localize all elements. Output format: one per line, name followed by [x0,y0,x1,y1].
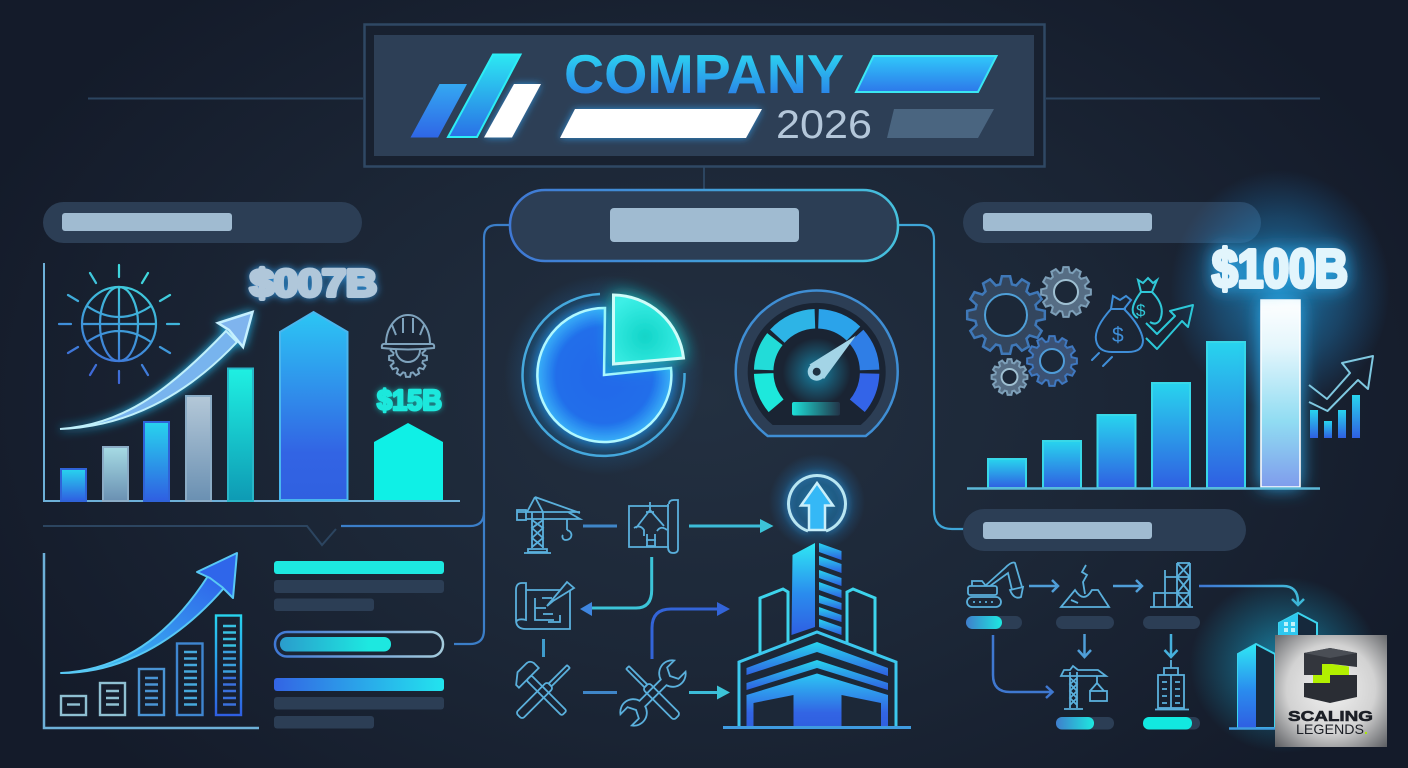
arrow [689,686,730,700]
icon: helmet and gear [382,315,434,377]
icon: gears [967,267,1091,395]
value label: $15B [377,385,442,417]
arrow [1029,580,1058,592]
icon: chevron arrow [1146,305,1193,349]
arrow: growth swoosh [60,312,252,429]
arrow [1164,634,1178,657]
title text: COMPANY [564,43,844,105]
axes [44,553,259,728]
tall arrow bar [280,312,348,500]
glow behind hero bar [1170,170,1390,410]
icon: tower crane [517,497,580,553]
value label: $100B [1212,239,1348,299]
pie chart [504,275,704,475]
icon: small trend chart [1309,356,1373,438]
icon: money bags: $ [1112,324,1124,347]
arrow: growth [61,553,237,673]
logo badge [1275,635,1387,747]
line [583,691,617,694]
title bar cyan [856,56,996,92]
bar chart [61,368,253,501]
title bar white [560,109,762,138]
progress chips row one [966,616,1200,629]
progress bar [275,632,443,656]
flow diagram [510,454,911,729]
header side rules and connector [88,98,1320,190]
arrow [993,635,1052,698]
panel: right top [963,170,1390,488]
icon: crane with load [1061,666,1107,709]
title banner [364,24,1044,166]
heading pill [963,202,1261,243]
icon: wrench and screwdriver [617,657,689,729]
arrow [1078,634,1091,657]
heading pill [510,190,898,261]
panel: left top [43,202,460,501]
icon: logo bars [410,54,541,138]
baseline [967,487,1320,490]
icon: hammer and screwdriver [510,659,574,723]
arrow [652,602,730,659]
line [542,639,545,657]
icon: money bags [1092,278,1162,366]
value label: $007B [250,263,377,305]
bar chart [988,342,1245,488]
building [723,543,911,728]
heading pill [963,509,1246,551]
icon: office building [1155,660,1189,710]
icon: blueprint [629,500,678,553]
gauge needle [808,336,856,381]
gauge [736,291,898,436]
title bar slate [887,109,994,138]
arrow [1199,586,1304,605]
logo wordmark: SCALING [1288,708,1373,725]
panel: centre [504,190,911,729]
progress chips row two [1056,717,1200,730]
panel: left bottom [43,526,444,728]
heading pill [43,202,362,243]
arrow [580,557,652,616]
line [583,524,617,528]
connectors from the centre pill [341,225,964,644]
icon: glowing buildings [1229,613,1317,728]
divider notch [43,526,336,545]
icon: money bags: $ [1136,301,1146,320]
icon: globe [59,265,179,383]
icon: plan with pencil [516,582,574,629]
teal arrow bar [374,423,443,500]
icon: circle up arrow [769,454,865,550]
arrow [1113,580,1142,592]
glow behind buildings [1190,577,1380,753]
bar chart: striped [61,616,241,715]
text placeholder bars [274,561,444,728]
icon: excavator [967,563,1023,607]
icon: scaffold [1150,563,1193,607]
panel: right bottom [963,509,1387,753]
logo wordmark: LEGENDS. [1296,721,1368,737]
year: 2026 [776,103,872,147]
axes [44,263,460,501]
icon: excavation [1061,565,1109,607]
hero bar [1261,300,1300,487]
arrow [689,519,774,533]
logo mark [1304,648,1357,703]
